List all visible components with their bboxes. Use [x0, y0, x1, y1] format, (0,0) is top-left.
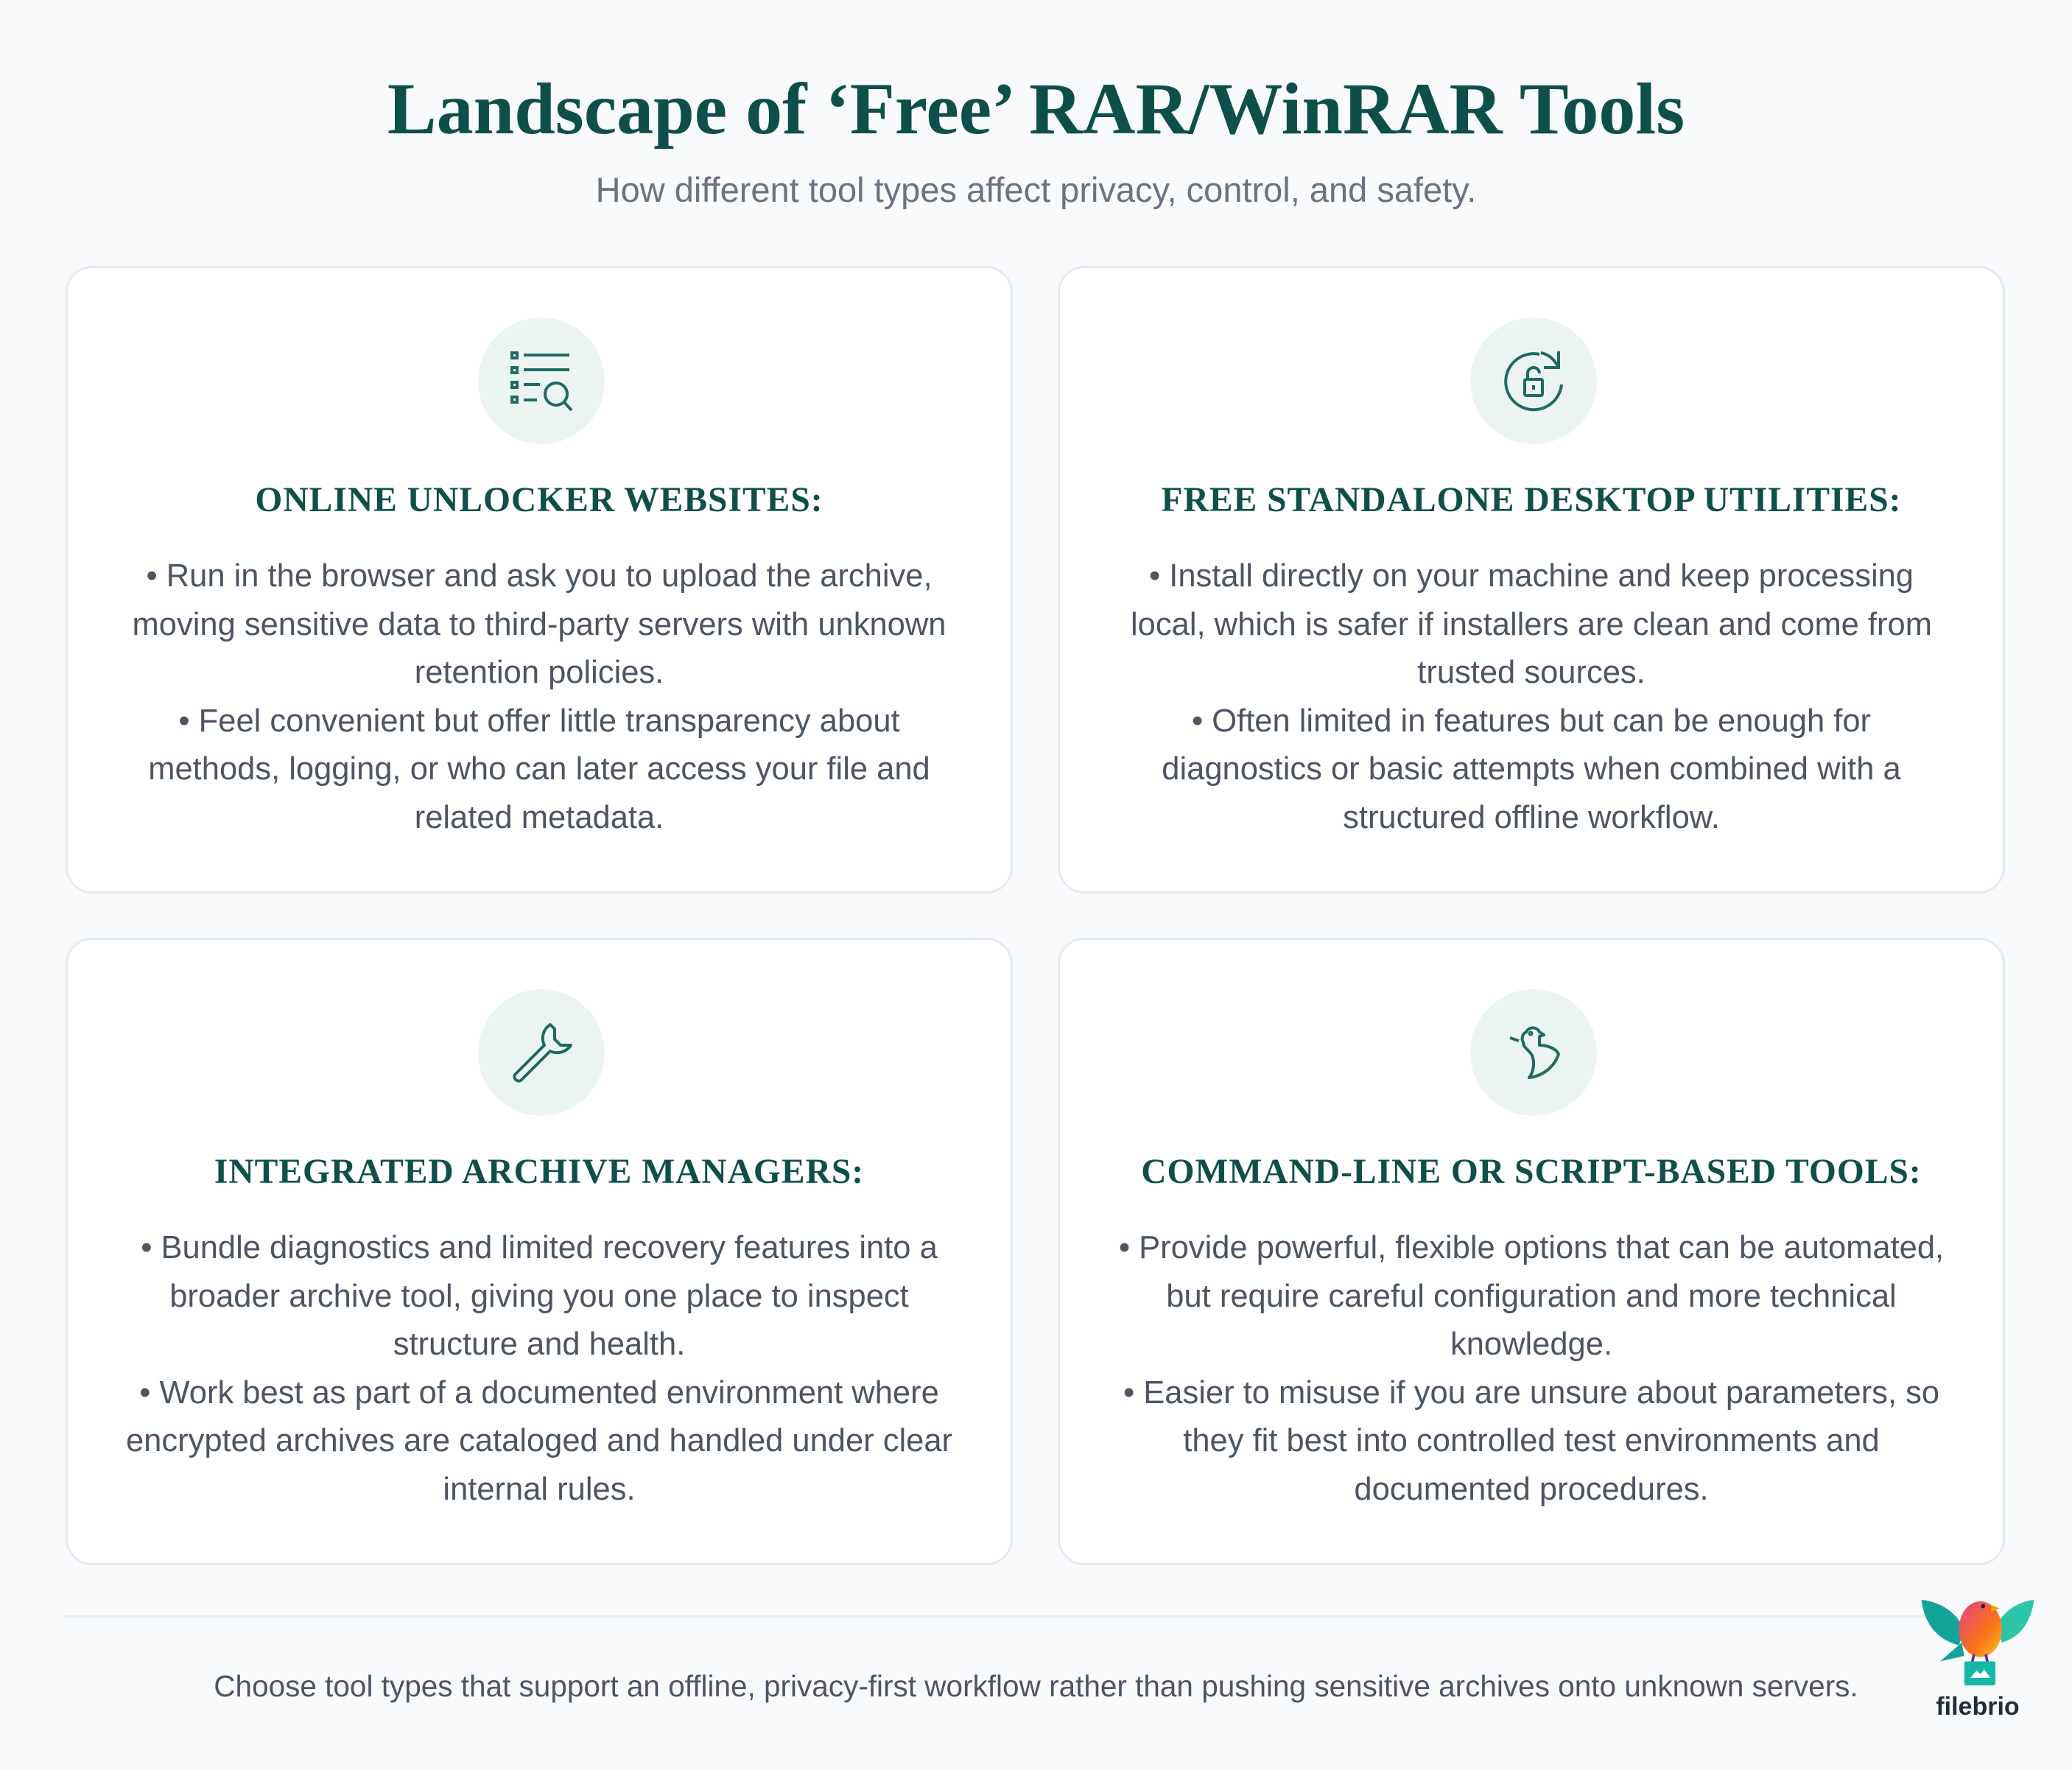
heading: INTEGRATED ARCHIVE MANAGERS: [214, 1153, 864, 1191]
panel: online unlocker websites [66, 266, 1013, 893]
subtitle: How different tool types affect privacy, control, and safety. [596, 170, 1476, 209]
text block [126, 1230, 952, 1507]
text block: • Work best as part of a documented environment where encrypted archives are cataloged and handled under clear internal rules. [126, 1374, 952, 1507]
text block [1131, 558, 1932, 835]
footer text: Choose tool types that support an offline, privacy-first workflow rather than pushing sensitive archives onto unknown servers. [214, 1669, 1858, 1703]
title: Landscape of ‘Free’ RAR/WinRAR Tools [387, 68, 1685, 150]
panel: command-line tools [1058, 938, 2005, 1565]
logo: filebrio: filebrio [1936, 1693, 2020, 1721]
panel: free standalone desktop utilities [1058, 266, 2005, 893]
heading: ONLINE UNLOCKER WEBSITES: [255, 481, 823, 519]
panel: integrated archive managers [66, 938, 1013, 1565]
icon: unlock with refresh [1470, 317, 1597, 444]
text block [133, 558, 946, 835]
text block: • Easier to misuse if you are unsure about parameters, so they fit best into controlled test environments and documented procedures. [1123, 1374, 1939, 1507]
text block: • Often limited in features but can be enough for diagnostics or basic attempts when combined with a structured offline workflow. [1162, 703, 1901, 835]
text block: • Feel convenient but offer little transparency about methods, logging, or who can later access your file and related metadata. [148, 703, 930, 835]
text block: • Install directly on your machine and keep processing local, which is safer if installers are clean and come from trusted sources. [1131, 558, 1932, 690]
text block: • Bundle diagnostics and limited recovery features into a broader archive tool, giving you one place to inspect structure and health. [141, 1230, 938, 1362]
text block [1119, 1230, 1944, 1507]
icon: bird [1470, 989, 1597, 1116]
icon: wrench [478, 989, 605, 1116]
logo: filebrio [1921, 1600, 2034, 1721]
icon: list with magnifier [478, 317, 605, 444]
text block: • Provide powerful, flexible options that can be automated, but require careful configuration and more technical knowledge. [1119, 1230, 1944, 1362]
text block: • Run in the browser and ask you to upload the archive, moving sensitive data to third-party servers with unknown retention policies. [133, 558, 946, 690]
heading: FREE STANDALONE DESKTOP UTILITIES: [1162, 481, 1901, 519]
heading: COMMAND-LINE OR SCRIPT-BASED TOOLS: [1141, 1153, 1922, 1191]
